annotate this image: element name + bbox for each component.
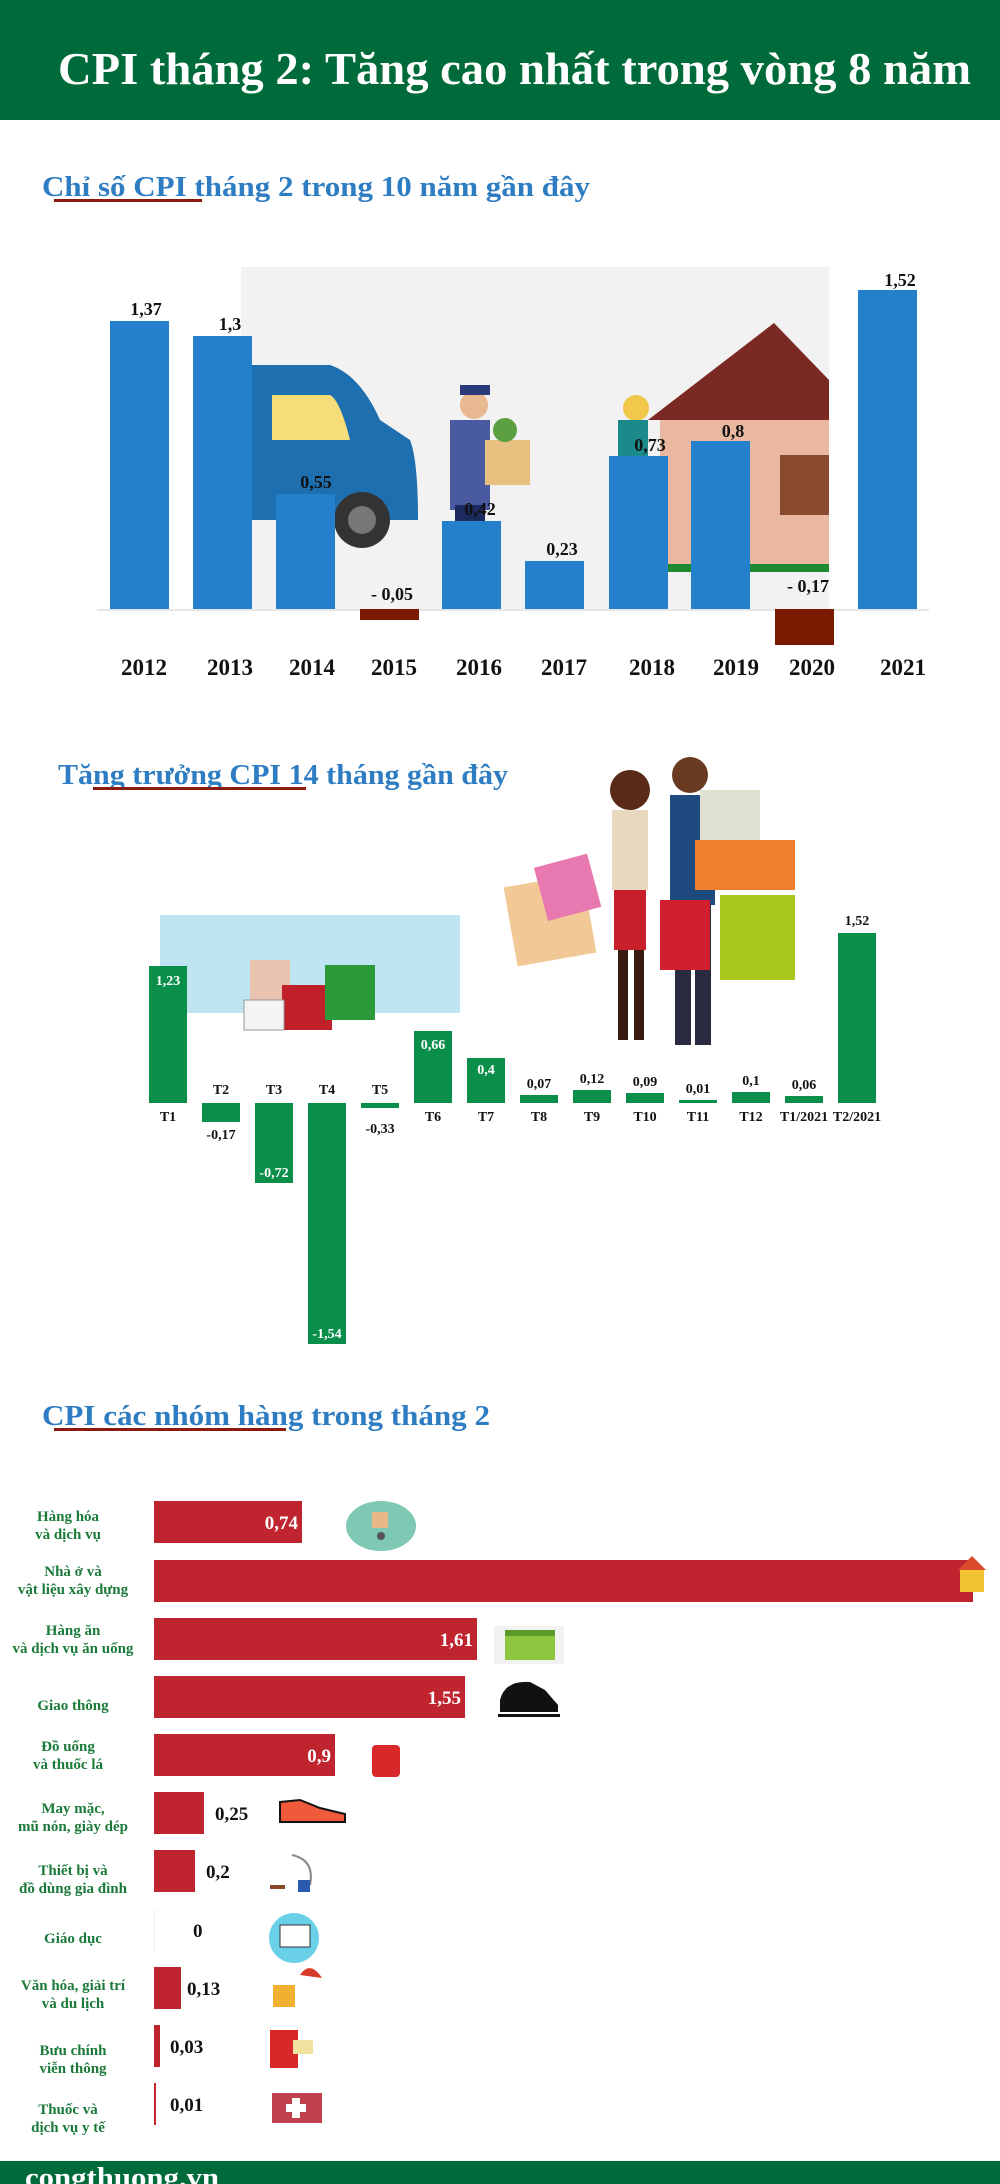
month labels — [160, 1083, 881, 1125]
values: 0,2 — [206, 1862, 230, 1883]
year labels: 2018 — [629, 655, 675, 680]
value labels: 1,52 — [884, 270, 916, 290]
value labels: -0,72 — [259, 1166, 289, 1181]
values: 0 — [193, 1921, 202, 1942]
month labels: T2/2021 — [833, 1110, 881, 1125]
icon: vacuum — [270, 1855, 311, 1892]
category labels: Bưu chính — [40, 2043, 107, 2059]
value labels: - 0,17 — [787, 576, 829, 596]
bars — [110, 290, 917, 609]
value labels — [156, 914, 869, 1342]
category labels: vật liệu xây dựng — [18, 1582, 129, 1598]
year labels: 2013 — [207, 655, 253, 680]
icon: shoe — [280, 1800, 345, 1822]
illustration background — [241, 267, 829, 609]
month labels: T1/2021 — [780, 1110, 828, 1125]
category labels: Hàng ăn — [46, 1623, 101, 1639]
category labels: May mặc, — [41, 1801, 105, 1817]
heading: section 2: Tăng trưởng CPI 14 tháng gần đây — [58, 759, 509, 791]
month labels: T9 — [584, 1110, 600, 1125]
category labels: và dịch vụ — [35, 1527, 101, 1543]
value labels: 1,3 — [219, 314, 241, 334]
value labels: 0,06 — [792, 1078, 816, 1093]
category labels: Văn hóa, giải trí — [21, 1978, 126, 1994]
category labels: Giao thông — [37, 1698, 109, 1714]
value labels: 1,37 — [130, 299, 162, 319]
month labels: T6 — [425, 1110, 441, 1125]
chart: CPI Feb 10 years — [97, 267, 929, 680]
values: 0,9 — [307, 1746, 331, 1767]
year labels: 2014 — [289, 655, 336, 680]
values: 0,01 — [170, 2095, 203, 2116]
category labels: Nhà ở và — [44, 1564, 102, 1580]
month labels: T3 — [266, 1083, 282, 1098]
bars — [154, 1501, 973, 2125]
value labels: 0,8 — [722, 421, 744, 441]
category labels: Thiết bị và — [38, 1863, 108, 1879]
axis baseline — [97, 609, 929, 611]
value labels: -0,17 — [206, 1128, 236, 1143]
value labels: 0,23 — [546, 539, 578, 559]
category labels: và du lịch — [42, 1996, 105, 2012]
month labels: T7 — [478, 1110, 494, 1125]
icon: shop — [494, 1626, 564, 1664]
category labels: Giáo dục — [44, 1931, 102, 1947]
heading: section 1: Chỉ số CPI tháng 2 trong 10 năm gần đây — [42, 171, 591, 203]
icon: house — [958, 1556, 986, 1592]
category labels: mũ nón, giày dép — [18, 1819, 128, 1835]
heading: section 3: CPI các nhóm hàng trong tháng 2 — [42, 1400, 490, 1432]
values: 1,55 — [428, 1688, 461, 1709]
category labels: và thuốc lá — [33, 1757, 103, 1773]
value labels: - 0,05 — [371, 584, 413, 604]
year labels — [121, 655, 926, 680]
illustration: glass shop window with bags — [160, 915, 460, 1030]
values: 0,03 — [170, 2037, 203, 2058]
value labels: 0,1 — [742, 1074, 760, 1089]
category labels: Đồ uống — [41, 1739, 95, 1755]
value labels: -0,33 — [365, 1122, 395, 1137]
value labels: 0,4 — [477, 1063, 495, 1078]
category labels — [13, 1509, 134, 2136]
values: 0,25 — [215, 1804, 248, 1825]
year labels: 2017 — [541, 655, 587, 680]
category labels: dịch vụ y tế — [31, 2120, 106, 2136]
values — [170, 1513, 473, 2116]
year labels: 2019 — [713, 655, 759, 680]
month labels: T4 — [319, 1083, 335, 1098]
value labels: 0,42 — [464, 499, 496, 519]
icon: truck — [251, 365, 418, 548]
values: 0,13 — [187, 1979, 220, 2000]
icon: trolley — [346, 1501, 416, 1551]
value labels: 0,73 — [634, 435, 666, 455]
category labels: Hàng hóa — [37, 1509, 100, 1525]
month labels: T8 — [531, 1110, 547, 1125]
month labels: T12 — [739, 1110, 763, 1125]
category labels: Thuốc và — [38, 2102, 98, 2118]
footer — [0, 2161, 1000, 2184]
category labels: đồ dùng gia đình — [19, 1881, 128, 1897]
value labels: 0,12 — [580, 1072, 604, 1087]
icon: luggage — [273, 1968, 322, 2007]
value labels: -1,54 — [312, 1327, 342, 1342]
month labels: T5 — [372, 1083, 388, 1098]
title: CPI tháng 2: Tăng cao nhất trong vòng 8 năm — [58, 43, 971, 94]
chart: CPI by goods group — [13, 1501, 986, 2136]
month labels: T10 — [633, 1110, 657, 1125]
header banner — [0, 0, 1000, 120]
value labels: 0,55 — [300, 472, 332, 492]
icon: postbox — [270, 2030, 313, 2068]
year labels: 2015 — [371, 655, 417, 680]
category labels: viễn thông — [39, 2061, 107, 2077]
year labels: 2021 — [880, 655, 926, 680]
value labels: 0,09 — [633, 1075, 657, 1090]
values: 0,74 — [265, 1513, 298, 1534]
year labels: 2012 — [121, 655, 167, 680]
year labels: 2016 — [456, 655, 502, 680]
category labels: và dịch vụ ăn uống — [13, 1641, 134, 1657]
value labels — [130, 270, 916, 604]
icon: medkit — [272, 2093, 322, 2123]
value labels: 1,52 — [845, 914, 869, 929]
value labels: 0,66 — [421, 1038, 445, 1053]
icon: delivery man — [450, 385, 530, 585]
month labels: T1 — [160, 1110, 176, 1125]
value labels: 0,07 — [527, 1077, 551, 1092]
icon: can — [372, 1745, 400, 1777]
month labels: T2 — [213, 1083, 229, 1098]
icon: woman — [618, 395, 649, 500]
value labels: 0,01 — [686, 1082, 710, 1097]
icon: house — [648, 323, 829, 572]
value labels: 1,23 — [156, 974, 180, 989]
year labels: 2020 — [789, 655, 835, 680]
month labels: T11 — [687, 1110, 709, 1125]
illustration: shopping couple — [504, 757, 795, 1045]
icon: books — [269, 1913, 319, 1963]
icon: train — [498, 1682, 560, 1717]
chart: CPI 14 months — [149, 914, 881, 1344]
values: 1,61 — [440, 1630, 473, 1651]
